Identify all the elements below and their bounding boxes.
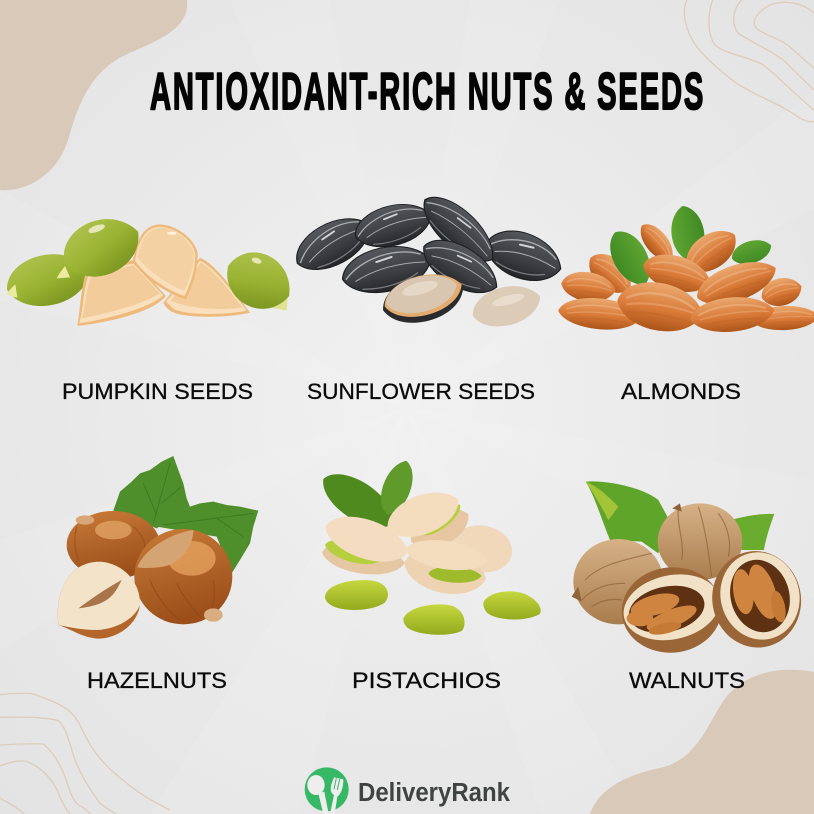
icon: green circle with spoon and fork <box>305 767 349 814</box>
panel: sunflower seeds <box>287 186 568 404</box>
footer logo: DeliveryRank <box>305 767 511 814</box>
panel: walnuts <box>572 481 809 693</box>
panel: pumpkin seeds <box>1 207 301 404</box>
decorative contour lines: top right <box>684 0 814 122</box>
decorative blob: top left <box>0 0 187 190</box>
illustration: almonds <box>557 203 814 338</box>
label: pistachios: PISTACHIOS <box>352 668 501 693</box>
decorative blob: bottom right <box>590 670 814 814</box>
title: ANTIOXIDANT-RICH NUTS & SEEDS <box>150 62 703 120</box>
illustration: hazelnuts <box>58 456 258 639</box>
label: hazelnuts: HAZELNUTS <box>87 668 227 693</box>
wordmark: DeliveryRank <box>358 779 511 807</box>
illustration: walnuts <box>572 481 809 657</box>
label: pumpkin seeds: PUMPKIN SEEDS <box>62 379 253 404</box>
illustration: pistachios <box>314 456 541 635</box>
label: sunflower seeds: SUNFLOWER SEEDS <box>307 379 535 404</box>
panel: pistachios <box>314 456 541 693</box>
illustration: pumpkin seeds <box>1 207 301 326</box>
panel: hazelnuts <box>58 456 258 693</box>
illustration: sunflower seeds <box>287 186 568 334</box>
label: almonds: ALMONDS <box>621 379 741 404</box>
panel: almonds <box>557 203 814 404</box>
label: walnuts: WALNUTS <box>629 668 745 693</box>
decorative contour lines: bottom left <box>0 693 170 814</box>
